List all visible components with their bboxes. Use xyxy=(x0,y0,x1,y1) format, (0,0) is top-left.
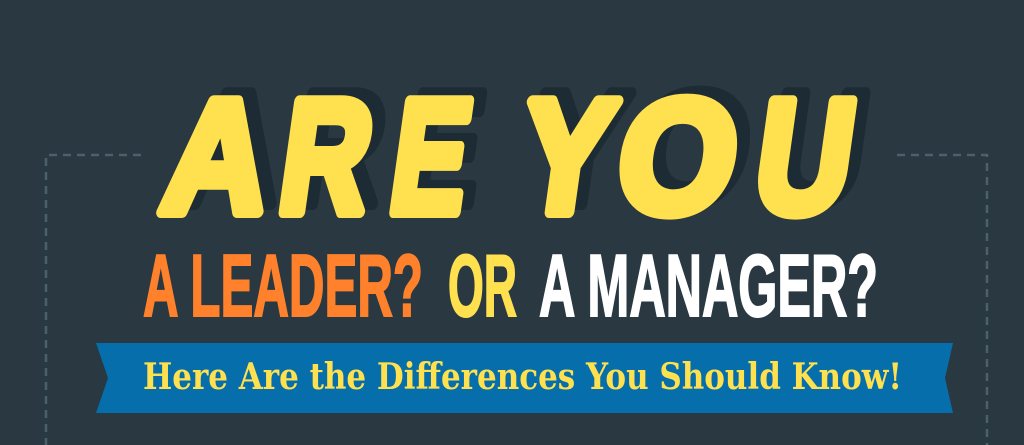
title shadow: ARE YOU: Y xyxy=(522,60,638,239)
title shadow: ARE YOU xyxy=(166,60,878,239)
title: ARE YOU: A xyxy=(153,68,282,247)
title: ARE YOU: O xyxy=(607,68,749,247)
title shadow: ARE YOU: E xyxy=(394,60,494,239)
title shadow: ARE YOU: R xyxy=(283,60,396,239)
banner text: Here Are the Differences You Should Know! xyxy=(143,356,902,398)
title: ARE YOU xyxy=(153,68,865,247)
title: ARE YOU: E xyxy=(381,68,481,247)
subtitle: OR: OR xyxy=(448,236,517,335)
ribbon banner xyxy=(96,343,953,413)
title: ARE YOU: U xyxy=(745,68,865,247)
title shadow: ARE YOU: U xyxy=(758,60,878,239)
title: ARE YOU: R xyxy=(270,68,383,247)
title shadow: ARE YOU: A xyxy=(166,60,295,239)
title shadow: ARE YOU: O xyxy=(620,60,762,239)
subtitle: A LEADER?: A LEADER? xyxy=(143,236,423,335)
title: ARE YOU: Y xyxy=(509,68,625,247)
